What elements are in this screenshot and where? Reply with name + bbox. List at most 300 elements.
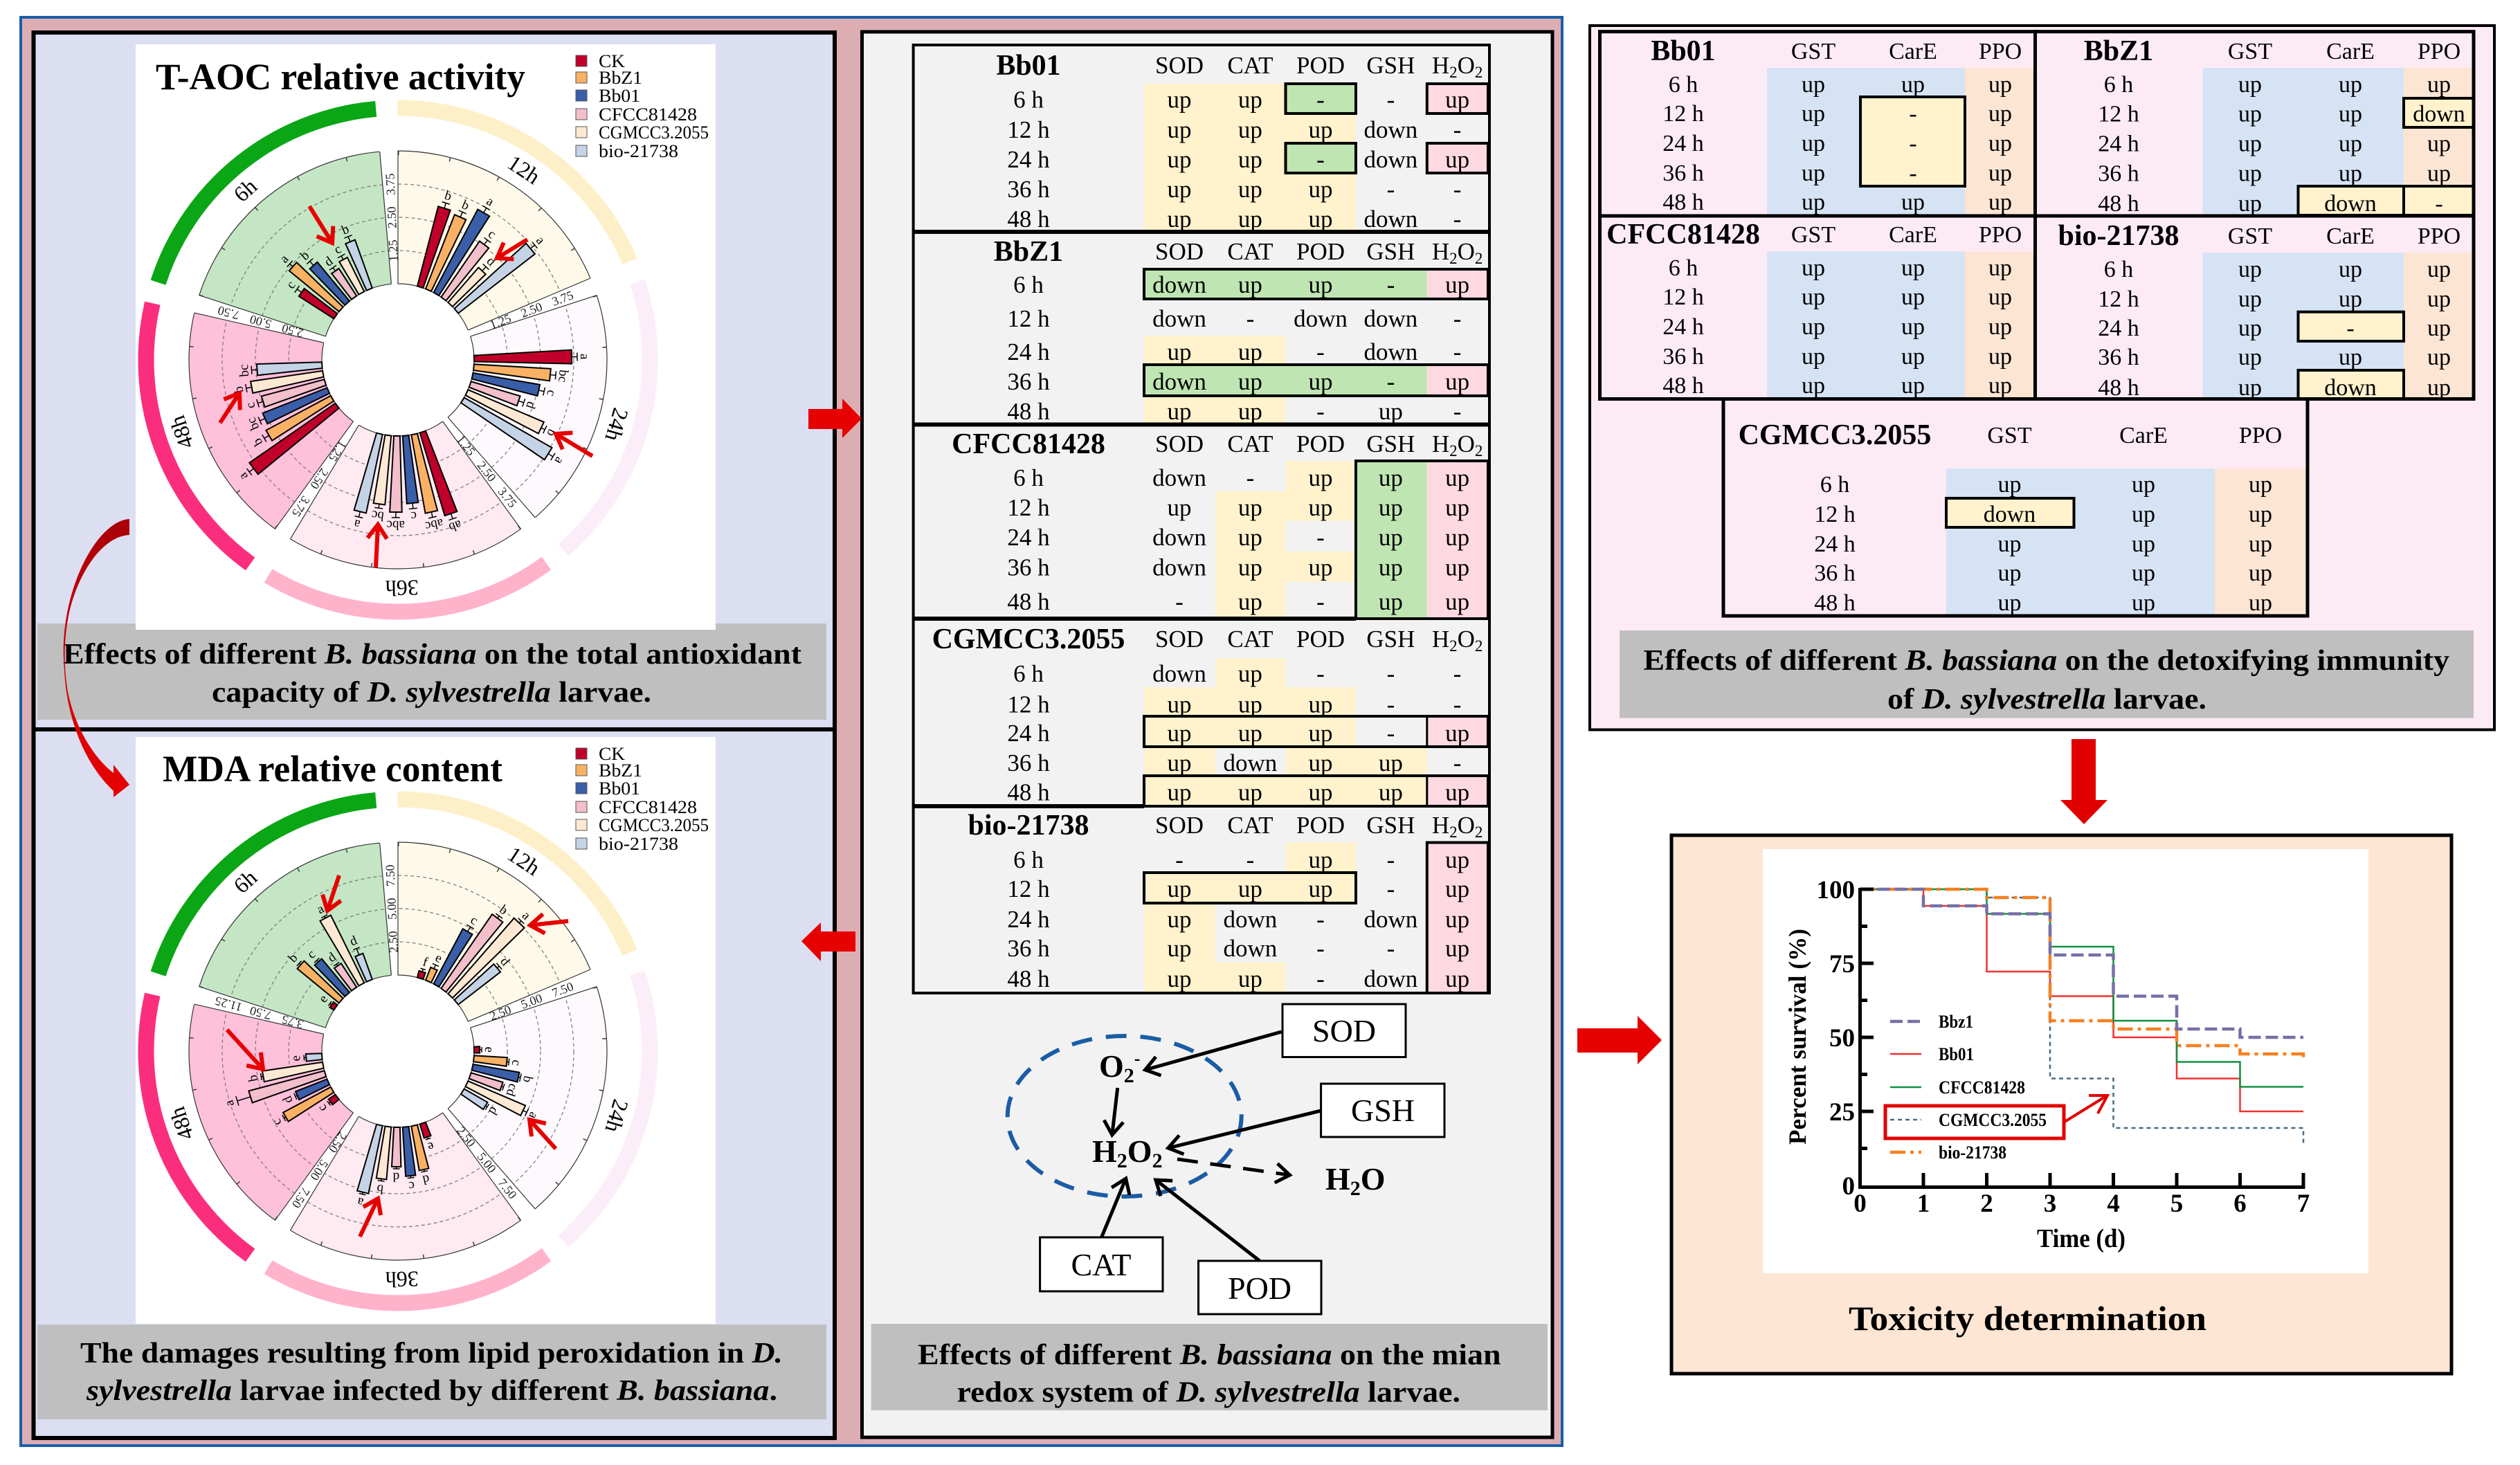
table section: Bb01: 2: [1475, 64, 1483, 81]
bars: 36h: [350, 430, 464, 535]
y axis labels: 0: [1842, 1172, 1855, 1201]
bars: 24h: b: [520, 1075, 535, 1084]
detox table: CGMCC3.2055: up: [2132, 561, 2155, 586]
bars: 6h: e: [316, 992, 331, 1006]
caption: detoxifying immunity: of D. sylvestrella larvae.: [1887, 684, 2206, 716]
table section: Bb01: down: [1364, 116, 1417, 143]
bars: 48h: bc: [244, 415, 262, 433]
detox table: Bb01: 24 h: [1662, 131, 1704, 156]
table section: bio-21738: [968, 810, 1483, 992]
caption text: T-AOC: [63, 639, 801, 709]
axis tick labels: 2.50: [519, 300, 544, 320]
bars: 36h: e: [426, 1138, 436, 1154]
table section: Bb01: 2: [1449, 64, 1458, 81]
detox table: CFCC81428: [1606, 219, 2022, 399]
axis tick labels: [213, 864, 575, 1210]
detox table: CFCC81428: CarE: [1889, 222, 1937, 248]
detox table: BbZ1: up: [2339, 72, 2362, 98]
bars: 6h: b: [298, 248, 312, 264]
detox table: CFCC81428: up: [1802, 255, 1825, 281]
table section: BbZ1: 48 h: [1007, 398, 1050, 425]
table section: BbZ1: H: [1432, 238, 1449, 265]
detox table: bio-21738: down: [2324, 375, 2377, 401]
title: T-AOC relative activity: T-AOC relative activity: [156, 56, 525, 98]
legend: T-AOC strains: [576, 51, 709, 161]
detox table: Bb01: -: [1909, 161, 1917, 186]
detox table: BbZ1: up: [2339, 101, 2362, 127]
detox table: Bb01: up: [1802, 72, 1825, 98]
detox table: CFCC81428: up: [1988, 373, 2012, 399]
table section: Bb01: 48 h: [1007, 206, 1050, 233]
table section: bio-21738: 6 h: [1013, 846, 1044, 873]
detox table: Bb01: up: [1988, 101, 2012, 127]
legend: T-AOC strains: CK: [599, 51, 625, 71]
sector labels: 6h: [228, 174, 262, 207]
table section: BbZ1: -: [1387, 368, 1395, 395]
table section: Bb01: SOD: [1155, 52, 1204, 79]
detox table: CFCC81428: up: [1901, 373, 1925, 399]
table section: bio-21738: down: [1224, 935, 1277, 962]
table section: CFCC81428: down: [1152, 464, 1206, 491]
axis tick labels: 3.75: [383, 173, 398, 195]
table section: Bb01: -: [1387, 176, 1395, 203]
bars: 12h: c: [485, 227, 498, 242]
detox cell fills: [1767, 68, 2474, 616]
table section: CFCC81428: -: [1316, 588, 1325, 615]
axis tick labels: 2.50: [475, 459, 499, 484]
bars: 24h: a: [551, 454, 567, 467]
table section: bio-21738: up: [1238, 965, 1262, 992]
detox table: CGMCC3.2055: up: [2132, 472, 2155, 498]
detox table: BbZ1: 24 h: [2098, 131, 2139, 156]
detox table: Bb01: PPO: [1979, 39, 2022, 64]
legend: T-AOC strains: BbZ1: [599, 68, 642, 88]
table section: CGMCC3.2055: up: [1445, 720, 1469, 747]
table section: CGMCC3.2055: up: [1379, 749, 1403, 776]
table section: CFCC81428: up: [1238, 588, 1262, 615]
bars: 6h: c: [284, 278, 299, 291]
detox table: CFCC81428: up: [1901, 255, 1925, 281]
table section: bio-21738: up: [1167, 906, 1192, 933]
table section: BbZ1: up: [1238, 338, 1262, 365]
table section: BbZ1: up: [1308, 271, 1333, 298]
detox table: Bb01: 6 h: [1669, 72, 1698, 98]
detox table: CGMCC3.2055: 12 h: [1814, 502, 1856, 527]
table section: BbZ1: up: [1238, 398, 1262, 425]
axes: [1860, 888, 2305, 1188]
detox table: bio-21738: up: [2238, 316, 2262, 341]
detox table: CFCC81428: up: [1802, 314, 1825, 340]
caption background: T-AOC: [37, 624, 826, 720]
detox table: Bb01: up: [1802, 161, 1825, 186]
caption text: MDA: [80, 1338, 783, 1407]
detox table: CGMCC3.2055: 36 h: [1814, 561, 1856, 586]
table section: CGMCC3.2055: 12 h: [1007, 691, 1050, 718]
axis tick labels: 3.75: [289, 493, 313, 519]
red highlight arrows: T-AOC: [220, 206, 592, 567]
detox table: bio-21738: 24 h: [2098, 316, 2139, 341]
panel: redox system: [862, 32, 1552, 1437]
sector labels: 36h: [385, 576, 419, 601]
table section: Bb01: 36 h: [1007, 176, 1050, 203]
table section: CGMCC3.2055: up: [1308, 720, 1333, 747]
arrow: to toxicity panel: [1577, 1016, 1662, 1064]
table section: CFCC81428: up: [1308, 494, 1333, 521]
detox table: Bb01: 48 h: [1662, 190, 1704, 215]
detox table: bio-21738: -: [2346, 316, 2355, 341]
table section: bio-21738: 36 h: [1007, 935, 1050, 962]
axis tick labels: 5.00: [248, 312, 273, 331]
detox table: CGMCC3.2055: up: [1997, 531, 2021, 557]
outer rings: [46, 700, 750, 1403]
detox table: BbZ1: 36 h: [2098, 161, 2139, 187]
table section: BbZ1: -: [1316, 398, 1325, 425]
y axis labels: 50: [1829, 1024, 1855, 1053]
bars: 36h: ab: [447, 517, 463, 535]
detox table: CFCC81428: up: [1901, 284, 1925, 310]
bars: 24h: a: [525, 1110, 541, 1122]
detox table: BbZ1: up: [2339, 161, 2362, 187]
table section: bio-21738: CAT: [1227, 812, 1273, 839]
x axis labels: 6: [2233, 1190, 2247, 1218]
enzyme box: GSH: [1321, 1084, 1444, 1137]
legend: [1890, 1012, 2047, 1163]
sector backgrounds: [199, 161, 597, 559]
caption text: MDA: sylvestrella larvae infected by different B. bassiana .: [86, 1375, 777, 1407]
table section: bio-21738: O: [1458, 812, 1475, 839]
legend: MDA strains: CK: [599, 744, 625, 764]
survival curve: CFCC81428: [1860, 889, 2303, 1086]
detox table: BbZ1: down: [2324, 191, 2377, 217]
bars: 6h: b: [286, 951, 301, 965]
detox table: CGMCC3.2055: CarE: [2119, 423, 2168, 448]
axis tick labels: 2.50: [326, 1129, 350, 1155]
table section: CFCC81428: -: [1316, 524, 1325, 551]
survival curve: Bbz1: [1860, 889, 2303, 1037]
detox table: CGMCC3.2055: up: [2132, 502, 2155, 527]
molecule: water: 2: [1350, 1177, 1361, 1200]
bars: 36h: abc: [424, 516, 444, 534]
x axis labels: 4: [2107, 1190, 2120, 1218]
bars: 12h: e: [433, 950, 444, 966]
survival chart: [1784, 876, 2310, 1253]
bars: 36h: c: [410, 508, 417, 523]
molecule: superoxide: 2: [1124, 1064, 1134, 1087]
detox table: Bb01: Bb01: [1651, 35, 1716, 67]
detox table: CFCC81428: CFCC81428: [1606, 219, 1760, 251]
survival curve: Bb01: [1860, 889, 2303, 1111]
table section: bio-21738: bio-21738: [968, 810, 1089, 841]
bars: 36h: c: [408, 1179, 415, 1193]
table section: bio-21738: up: [1445, 846, 1469, 873]
table section: bio-21738: 2: [1449, 824, 1458, 841]
x axis title: Time (d): [2037, 1224, 2125, 1253]
table section: Bb01: up: [1238, 146, 1262, 173]
enzyme box: POD: [1199, 1261, 1321, 1314]
table section: BbZ1: -: [1316, 338, 1325, 365]
bars: 24h: a: [577, 354, 592, 360]
detox table: bio-21738: up: [2339, 345, 2362, 370]
table section: bio-21738: -: [1316, 935, 1325, 962]
detox table: CFCC81428: up: [1802, 373, 1825, 399]
axis tick labels: 3.75: [280, 1012, 305, 1032]
detox table: CGMCC3.2055: up: [1997, 472, 2021, 498]
table section: CGMCC3.2055: up: [1308, 691, 1333, 718]
detox table: Bb01: up: [1802, 131, 1825, 156]
detox table: CFCC81428: up: [1988, 284, 2012, 310]
detox table: CFCC81428: up: [1901, 344, 1925, 370]
bars: 24h: cd: [502, 1082, 520, 1098]
detox table: bio-21738: CarE: [2326, 224, 2375, 249]
caption: redox: Effects of different B. bassiana on the mian: [918, 1340, 1501, 1372]
bars: 24h: c: [509, 1059, 524, 1066]
y axis title: Percent survival (%): [1784, 929, 1811, 1145]
detox table: Bb01: up: [1988, 72, 2012, 98]
caption background: MDA: [37, 1325, 826, 1419]
table section: BbZ1: up: [1167, 398, 1192, 425]
bars: 24h: [459, 349, 592, 471]
detox table: BbZ1: PPO: [2418, 39, 2460, 64]
detox table: CFCC81428: up: [1988, 344, 2012, 370]
table section: CGMCC3.2055: CGMCC3.2055: [932, 624, 1125, 655]
outer panel: oxidative stress group: [21, 17, 1562, 1446]
detox table: Bb01: up: [1901, 72, 1925, 98]
table: redox enzyme responses: [914, 45, 1489, 993]
x axis labels: 7: [2297, 1190, 2310, 1218]
bars: 12h: b: [460, 197, 471, 213]
legend: MDA strains: CFCC81428: [599, 797, 697, 817]
table section: CFCC81428: 2: [1475, 442, 1483, 459]
detox table: CGMCC3.2055: up: [2132, 531, 2155, 557]
table section: CGMCC3.2055: down: [1152, 660, 1206, 687]
table section: Bb01: -: [1316, 146, 1325, 173]
table section: CGMCC3.2055: -: [1453, 691, 1461, 718]
table section: CFCC81428: 48 h: [1007, 588, 1050, 615]
detox table: bio-21738: 6 h: [2104, 257, 2133, 282]
detox table: bio-21738: 36 h: [2098, 345, 2139, 370]
detox table: CGMCC3.2055: 6 h: [1820, 472, 1849, 498]
table section: CGMCC3.2055: -: [1316, 660, 1325, 687]
detox table: Bb01: -: [1909, 101, 1917, 127]
circular bar chart: T-AOC: [46, 8, 750, 711]
detox table: bio-21738: 48 h: [2098, 375, 2139, 401]
table section: CGMCC3.2055: -: [1387, 660, 1395, 687]
table section: CFCC81428: down: [1152, 524, 1206, 551]
table section: Bb01: Bb01: [996, 50, 1061, 82]
panel: T-AOC relative activity: [33, 8, 835, 729]
table section: Bb01: [996, 50, 1483, 233]
table section: CGMCC3.2055: CAT: [1227, 626, 1273, 653]
sector labels: 48h: [164, 1104, 199, 1143]
table section: Bb01: up: [1445, 146, 1469, 173]
table section: bio-21738: GSH: [1366, 812, 1415, 839]
table section: CGMCC3.2055: -: [1387, 691, 1395, 718]
table section: Bb01: up: [1308, 116, 1333, 143]
detox table: CFCC81428: up: [1802, 284, 1825, 310]
detox table: BbZ1: up: [2427, 72, 2451, 98]
axis tick labels: 7.50: [495, 1176, 520, 1201]
y axis labels: 25: [1829, 1098, 1855, 1127]
detox table: CGMCC3.2055: PPO: [2239, 423, 2282, 448]
bars: 6h: c: [332, 242, 344, 257]
table section: Bb01: up: [1167, 206, 1192, 233]
table section: Bb01: up: [1167, 86, 1192, 113]
table section: bio-21738: -: [1175, 846, 1184, 873]
table section: CGMCC3.2055: down: [1224, 749, 1277, 776]
axis tick labels: 3.75: [495, 484, 520, 510]
detox table: bio-21738: up: [2238, 286, 2262, 312]
table section: Bb01: up: [1238, 176, 1262, 203]
table section: BbZ1: down: [1152, 368, 1206, 395]
table section: BbZ1: up: [1167, 338, 1192, 365]
bars: 36h: abc: [386, 518, 405, 532]
table section: Bb01: up: [1167, 146, 1192, 173]
axis tick labels: 7.50: [550, 979, 575, 1000]
detox table: BbZ1: up: [2238, 101, 2262, 127]
table section: CGMCC3.2055: [932, 624, 1483, 806]
legend: T-AOC strains: bio-21738: [599, 141, 678, 161]
white chart background: MDA: [136, 737, 716, 1324]
table section: Bb01: -: [1316, 86, 1325, 113]
detox table: CGMCC3.2055: 24 h: [1814, 531, 1856, 557]
detox table: bio-21738: 12 h: [2098, 286, 2139, 312]
bars: 24h: bc: [555, 369, 571, 383]
enzyme box: SOD: [1282, 1004, 1406, 1057]
white chart background: T-AOC: [136, 44, 716, 630]
detox table: Bb01: 36 h: [1662, 161, 1704, 186]
bars: 24h: d: [523, 399, 538, 411]
table section: Bb01: 12 h: [1007, 116, 1050, 143]
table section: CGMCC3.2055: -: [1453, 749, 1461, 776]
red highlight arrows: MDA: [227, 875, 568, 1237]
axis tick labels: 5.00: [519, 991, 544, 1012]
molecule: hydrogen peroxide: 2: [1152, 1149, 1163, 1172]
bars: 48h: b: [246, 1073, 261, 1083]
table section: CFCC81428: up: [1445, 554, 1469, 581]
table section: Bb01: H: [1432, 52, 1449, 79]
enzyme box: SOD: SOD: [1312, 1013, 1376, 1048]
table section: BbZ1: -: [1247, 305, 1254, 332]
bars: 6h: d: [322, 254, 336, 270]
bars: 48h: c: [269, 1116, 285, 1128]
caption: detoxifying immunity: Effects of different B. bassiana on the detoxifying immunity: [1643, 645, 2449, 677]
table section: CFCC81428: CFCC81428: [952, 428, 1105, 460]
survival curve: bio-21738: [1860, 889, 2303, 1062]
molecule: water: O: [1361, 1161, 1386, 1196]
sector labels: [164, 150, 633, 601]
detox table: BbZ1: up: [2339, 131, 2362, 156]
table section: bio-21738: 12 h: [1007, 875, 1050, 902]
table section: CFCC81428: up: [1238, 524, 1262, 551]
bars: 36h: a: [356, 1194, 365, 1210]
detox table: bio-21738: PPO: [2418, 224, 2460, 249]
table section: BbZ1: up: [1445, 271, 1469, 298]
detox table: bio-21738: GST: [2228, 224, 2272, 249]
table section: CFCC81428: up: [1445, 524, 1469, 551]
table section: BbZ1: 2: [1475, 250, 1483, 267]
table section: bio-21738: 24 h: [1007, 906, 1050, 933]
table section: bio-21738: -: [1316, 965, 1325, 992]
table section: BbZ1: 12 h: [1007, 305, 1050, 332]
table section: bio-21738: 2: [1475, 824, 1483, 841]
table section: BbZ1: 6 h: [1013, 271, 1044, 298]
table section: CGMCC3.2055: 2: [1475, 637, 1483, 655]
caption: redox: redox system of D. sylvestrella larvae.: [957, 1377, 1460, 1409]
detox table: bio-21738: [2058, 220, 2460, 401]
bars: 6h: d: [347, 933, 360, 949]
detox table: Bb01: up: [1988, 161, 2012, 186]
table section: CFCC81428: CAT: [1227, 430, 1273, 457]
table section: BbZ1: down: [1364, 338, 1417, 365]
bars: 6h: c: [305, 947, 318, 962]
table section: CFCC81428: 36 h: [1007, 554, 1050, 581]
table section: CFCC81428: H: [1432, 430, 1449, 457]
table section: BbZ1: O: [1458, 238, 1475, 265]
bars: 48h: d: [280, 1093, 296, 1106]
detox table: Bb01: GST: [1791, 39, 1835, 64]
detox table: Bb01: up: [1988, 190, 2012, 215]
table section: bio-21738: up: [1167, 875, 1192, 902]
table section: bio-21738: down: [1224, 906, 1277, 933]
detox table: CFCC81428: 48 h: [1662, 373, 1704, 399]
axis tick labels: 2.50: [280, 321, 305, 340]
table section: bio-21738: up: [1445, 935, 1469, 962]
table section: Bb01: -: [1453, 206, 1461, 233]
table section: CGMCC3.2055: POD: [1296, 626, 1345, 653]
table section: Bb01: GSH: [1366, 52, 1415, 79]
table section: BbZ1: -: [1453, 338, 1461, 365]
axis tick labels: 3.75: [550, 288, 575, 309]
molecule: superoxide: O: [1099, 1048, 1124, 1084]
bars: 48h: b: [250, 435, 266, 448]
table section: Bb01: up: [1445, 86, 1469, 113]
detox table: bio-21738: up: [2339, 286, 2362, 312]
table section: CFCC81428: up: [1379, 494, 1403, 521]
detox table: CGMCC3.2055: up: [2132, 590, 2155, 616]
table section: Bb01: up: [1238, 116, 1262, 143]
table section: bio-21738: SOD: [1155, 812, 1204, 839]
bars: 36h: b: [376, 1181, 384, 1196]
detox table: Bb01: up: [1802, 101, 1825, 127]
axis tick labels: 7.50: [216, 303, 241, 322]
bars: 6h: [275, 221, 374, 320]
bars: 24h: c: [543, 389, 559, 397]
table section: CFCC81428: 24 h: [1007, 524, 1050, 551]
table section: bio-21738: -: [1247, 846, 1254, 873]
detox table: bio-21738: bio-21738: [2058, 220, 2179, 252]
detox table: BbZ1: [2084, 35, 2465, 217]
table section: bio-21738: up: [1445, 906, 1469, 933]
table section: CFCC81428: up: [1238, 494, 1262, 521]
table section: bio-21738: 48 h: [1007, 965, 1050, 992]
detox table: BbZ1: CarE: [2326, 39, 2375, 64]
table section: bio-21738: up: [1308, 846, 1333, 873]
bars: 24h: b: [543, 427, 559, 439]
table section: CGMCC3.2055: SOD: [1155, 626, 1204, 653]
table section: BbZ1: up: [1379, 398, 1403, 425]
legend: bio-21738: [1939, 1143, 2006, 1163]
bars: 48h: a: [221, 1098, 237, 1108]
detox table: Bb01: 12 h: [1662, 101, 1704, 127]
circular bar chart: MDA: [46, 700, 750, 1403]
detox table: CGMCC3.2055: down: [1984, 502, 2036, 527]
detox table: Bb01: CarE: [1889, 39, 1937, 64]
table section: BbZ1: up: [1308, 368, 1333, 395]
detox table: CGMCC3.2055: up: [2249, 590, 2272, 616]
axis tick labels: 1.25: [386, 239, 401, 262]
table section: CGMCC3.2055: up: [1445, 779, 1469, 806]
detox table: CGMCC3.2055: up: [2249, 531, 2272, 557]
